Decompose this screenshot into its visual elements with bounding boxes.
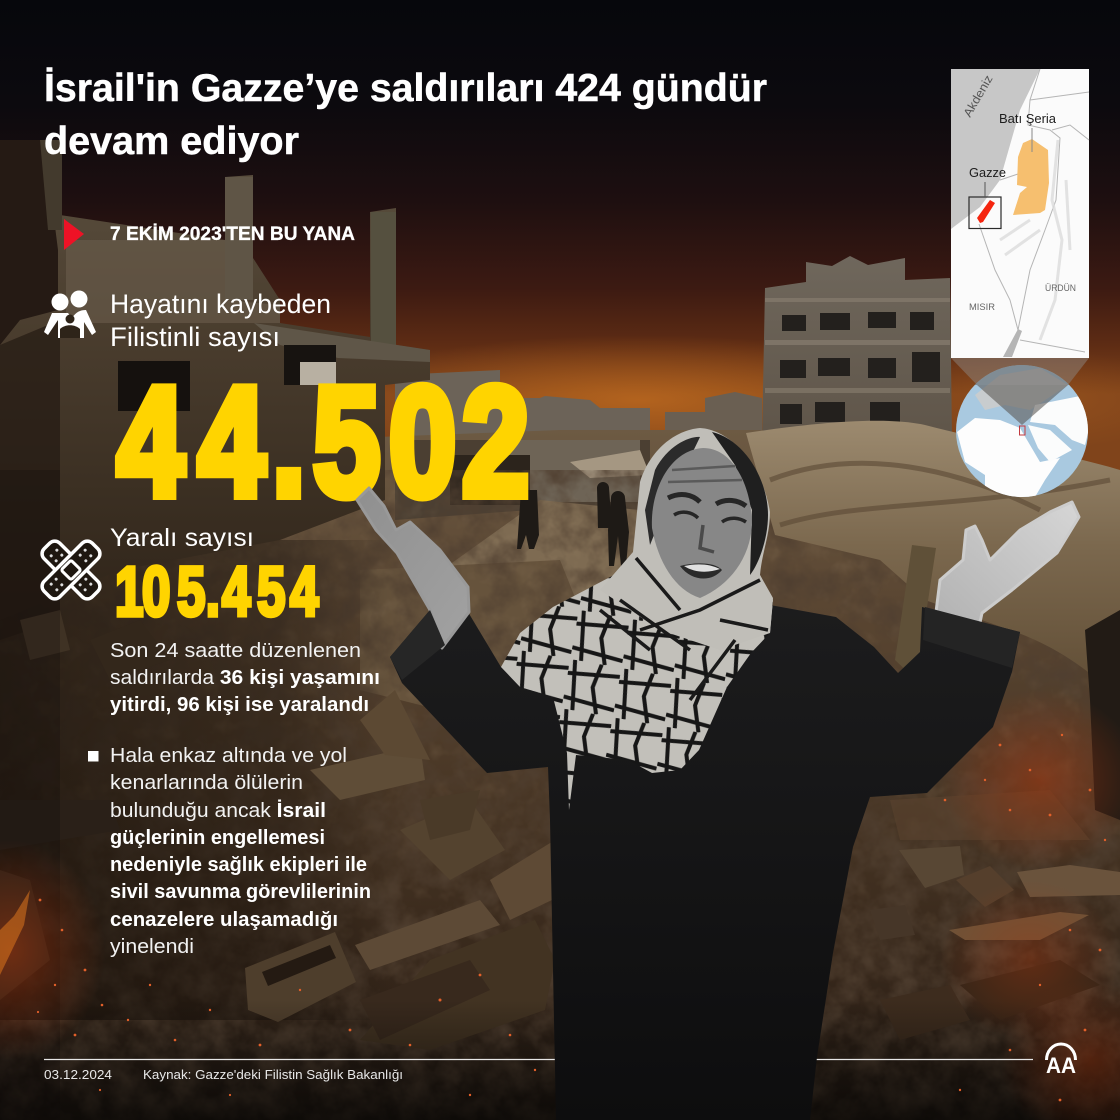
- scarf wrap: [501, 565, 773, 810]
- background: ground and rubble field: [0, 430, 1120, 1120]
- title: [44, 67, 767, 163]
- woman figure: [357, 428, 1079, 1120]
- borders and terrain: [979, 69, 1089, 352]
- map labels: Akdeniz: [960, 73, 996, 120]
- text block: bullet note: [88, 745, 371, 958]
- background: foreground rubble blocks left: [0, 610, 555, 1050]
- Asia: [1030, 395, 1090, 445]
- text block: bullet note: cenazelere ulaşamadığı: [110, 909, 338, 931]
- locator map: Gazze: [969, 165, 1006, 180]
- icon: family: [44, 290, 96, 338]
- Africa: [957, 418, 1060, 497]
- background: sky: [0, 0, 1120, 480]
- text block: bullet note: sivil savunma görevlilerinin: [110, 881, 371, 903]
- text block: bullet note: yinelendi: [110, 936, 194, 958]
- background: distant people: [517, 482, 629, 566]
- Gaza Strip: [977, 200, 995, 223]
- title: devam ediyor: [44, 120, 299, 163]
- label: wounded: Yaralı sayısı: [110, 524, 254, 552]
- right cuff: [923, 607, 1020, 668]
- locator box: [1020, 426, 1025, 435]
- face features: [668, 466, 746, 579]
- globe: [956, 360, 1090, 497]
- locator map: Batı Şeria: [999, 111, 1057, 126]
- Europe: [975, 368, 1068, 410]
- right hand: [935, 502, 1079, 637]
- map land: [951, 69, 1089, 358]
- Gulf of Aqaba: [1003, 329, 1022, 357]
- background: right damaged building: [762, 256, 952, 440]
- bullet square: [88, 751, 98, 762]
- view cone: [977, 385, 1068, 425]
- headscarf dark inner fold right: [712, 432, 768, 575]
- text block: last 24 hours: [110, 640, 380, 716]
- icon: red triangle: [64, 219, 84, 250]
- background: distant buildings: [395, 370, 762, 440]
- footer rule: [44, 1058, 1033, 1060]
- label: deaths: [110, 289, 331, 352]
- text block: bullet note: Hala enkaz altında ve yol: [110, 745, 347, 767]
- locator map: [951, 69, 1089, 358]
- background: foreground rubble blocks right: [870, 790, 1120, 1040]
- text block: bullet note: güçlerinin engellemesi: [110, 827, 325, 849]
- number: deaths: 44.502: [117, 356, 529, 528]
- label: deaths: Filistinli sayısı: [110, 322, 280, 352]
- scarf folds: [600, 558, 768, 700]
- text block: bullet note: bulunduğu ancak İsrail: [110, 799, 326, 822]
- label: deaths: Hayatını kaybeden: [110, 289, 331, 319]
- text block: bullet note: nedeniyle sağlık ekipleri ile: [110, 854, 367, 876]
- sea: [951, 69, 1040, 229]
- icon: crossed bandages: [23, 522, 119, 618]
- face: [652, 448, 752, 598]
- funnel between map and globe: [951, 358, 1089, 385]
- background: left ruined building: [0, 140, 430, 640]
- Arabia: [1028, 425, 1072, 462]
- text block: last 24 hours: saldırılarda 36 kişi yaşamını: [110, 667, 380, 689]
- number: wounded: 105.454: [115, 553, 318, 631]
- locator map: MISIR: [969, 302, 995, 313]
- locator map: ÜRDÜN: [1045, 283, 1076, 294]
- text block: bullet note: kenarlarında ölülerin: [110, 772, 303, 794]
- AA logo: AA: [1046, 1053, 1076, 1078]
- West Bank: [1013, 139, 1049, 215]
- headscarf: [600, 428, 773, 650]
- footer text: Kaynak: Gazze'deki Filistin Sağlık Bakanlığı: [143, 1067, 403, 1082]
- left hand: [357, 488, 469, 648]
- headscarf dark inner fold left: [645, 437, 700, 545]
- text block: last 24 hours: yitirdi, 96 kişi ise yaralandı: [110, 694, 369, 716]
- title: İsrail'in Gazze’ye saldırıları 424 gündür: [44, 67, 767, 110]
- background: fire glow and embers: [0, 690, 1120, 1120]
- subheading with red arrow: 7 EKİM 2023'TEN BU YANA: [110, 224, 355, 245]
- background: vignette: [0, 470, 1120, 1120]
- background: tent: [746, 421, 1120, 820]
- Gaza locator box: [969, 197, 1001, 228]
- footer text: 03.12.2024: [44, 1067, 112, 1082]
- leader lines: [984, 182, 986, 197]
- subheading with red arrow: [64, 219, 355, 250]
- left cuff: [390, 610, 445, 680]
- dress: [390, 605, 1020, 1120]
- text block: last 24 hours: Son 24 saatte düzenlenen: [110, 640, 361, 662]
